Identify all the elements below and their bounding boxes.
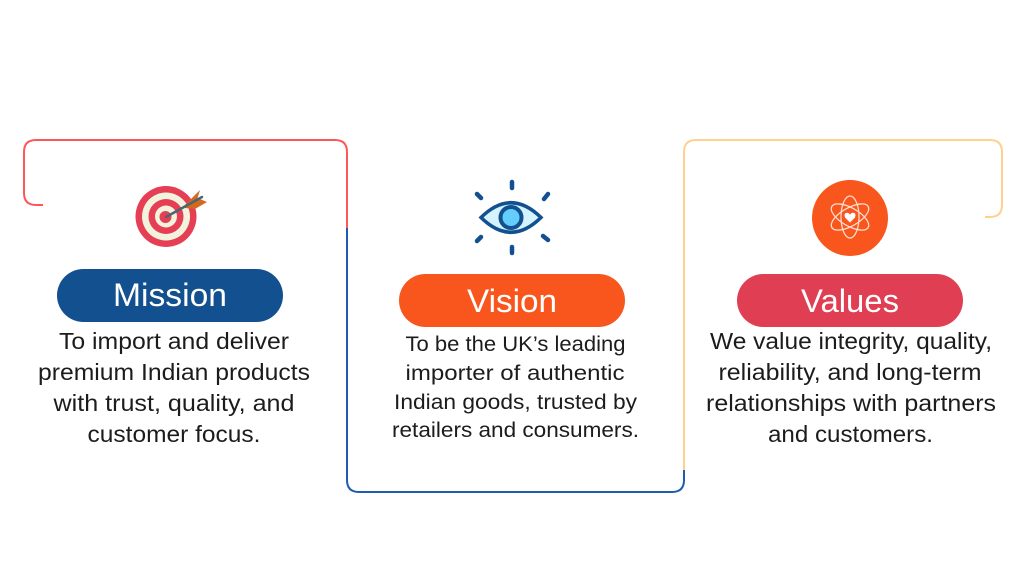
text block: mission: customer focus. [88,421,260,447]
text block: vision: retailers and consumers. [392,418,639,442]
icon: target with arrow [136,186,207,247]
panel: values frame [684,140,1002,470]
heading: values pill [737,274,963,327]
icon: eye with rays [477,182,548,253]
heading: mission pill [57,269,283,322]
text block: mission [38,328,310,447]
panel: mission frame [24,140,347,228]
text block: mission: premium Indian products [38,359,310,385]
heading: values pill: Values [801,283,899,319]
text block: values: reliability, and long-term [718,359,982,385]
panel: vision frame [347,228,684,492]
text block: vision [392,332,639,442]
heading: vision pill: Vision [467,283,557,319]
icon: atom with heart [812,180,888,256]
text block: vision: To be the UK’s leading [406,332,626,356]
text block: values: We value integrity, quality, [710,328,992,354]
text block: vision: importer of authentic [406,361,625,385]
text block: mission: with trust, quality, and [52,390,295,416]
text block: values: relationships with partners [706,390,996,416]
text block: values [706,328,996,447]
text block: mission: To import and deliver [59,328,289,354]
heading: vision pill [399,274,625,327]
heading: mission pill: Mission [113,277,227,313]
text block: values: and customers. [768,421,933,447]
text block: vision: Indian goods, trusted by [394,390,637,414]
